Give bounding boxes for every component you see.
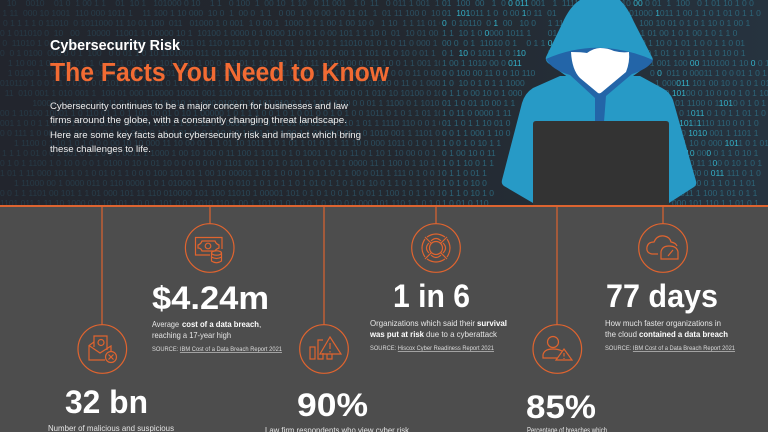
binary code pattern: right: 0 1 10 0 1011 1 0 110 101 01 0 10 0 01 1 00 10 1 01 1 0 1 0 1 1 0 10 0 1 [442,48,746,58]
source: SOURCE: Hiscox Cyber Readiness Report 2021 [370,346,495,352]
source: SOURCE: IBM Cost of a Data Breach Report 2021 [605,346,736,352]
panel: survival at risk [369,206,507,352]
binary code pattern: left: 0 1 011010 0 10 00 10000 11001 1 0 0000 10 1 10100 1 0000 0 1 0000 10 0 0 1 0 00 101 1 1 10 0 01 10 01 00 1111 10 0 1 01 [0,28,496,38]
description: How much faster organizations in [605,318,721,328]
stat: $4.24m [152,280,269,316]
binary code pattern: left: 1 0100 1 1 00 0 10 1 0 00 01 1001 0 0 1 101 0 01 0 00 1 11 0 01 000 10 110 0 11 1 00 1 0 1000 1 0 1 0 0 0 11 0 00011 1 0 0 01 1 0 [3,68,501,78]
icon: bars with warning [300,325,348,373]
header background [0,0,768,206]
stat: 90% [297,387,368,423]
binary code pattern: right: 0 0 10110 0 1 00 10 0 1 11 01 00 0 11111 1 100 10 01 0 1 0 1 10 0 1 00 1 [442,18,750,28]
binary code pattern: left: 10000 0 0 010 1 01 11 0 1 1 01 0 10 010 1 1 000 0100 0 11 101 010 0 1 0 1 0 0 1 00 0 0 01 1 1100 0 1 1010 0 1 0 1 01 1 0 1 10 0 1 [30,98,527,108]
description: the cloud [605,329,637,339]
binary code pattern: left: 1101 011 1 11 10 1000 0 0 10 101 1 0 0 1 101 0 0 10010 110 1 00 1 1010 1 0 1 0 0 1 0 110 0 0 000 101 110 1 1 0 1 0 10 0 1 01 1 0 10 [0,198,505,208]
face mask [571,48,629,93]
panel: data breach cost [152,206,283,353]
binary code pattern: left: 0 0 111 1 0 00 1 01 0 1 1 0 0 1 0 1 0 01 0 1 1 1 01 00 0 1 10 1 0 1 001 1 0 1 00 1 1 01 00 0 01 0 0 1010 001 1 1101 0 1 1 0 0 10 1 [0,128,488,138]
binary code pattern: right: 0 0 1010 001 1 1101 1 [674,128,759,138]
binary code pattern: right: 0 1 1 0 01 1 [442,168,487,178]
description: Average [152,319,179,329]
description: Organizations which said their [370,318,475,328]
binary code pattern: right: 1 0 01 0 110 [442,198,489,208]
binary code pattern: left: 1 1100 0 1 10 1 0 1 0 0 0 00 10 10 000 11 10 00 01 1 1 01 10 1011 1 0 1 01 1 01 0 1 1 11 10 0 000 1011 0 1 0 1 1 0 01 0 1 1 0 10 0 1 [14,138,514,148]
title: The Facts You Need to Know [50,59,389,87]
binary code pattern: right: 01 1 0 01 10 00 1 1 [442,98,516,108]
binary code pattern: right: 01 10 0 1 1 0 1 1 01 [680,178,756,188]
binary code pattern: right: 1 10 000 0 1 1 0 10 1 [678,148,759,158]
binary code pattern: right: 0 0 011 0 00011 1 0 0 01 1 0 1 [650,68,767,78]
hacker illustration [502,0,696,205]
description: contained a data breach [639,329,728,339]
binary code pattern: left: 0 1 1 1 1 0 11010 0 1011000 11 10 01 100 011 01000 1 0 001 1 0 00 1 1000 1 1 1 00 1 00 10 0 1 10 1 1 11 01 00 0 11111 1 [3,18,489,28]
icon: cloud with gauge [639,224,687,272]
binary code pattern: right: 10 10100 0 10 0 0 0 1 0 1 10 [660,88,768,98]
hooded body [502,76,696,203]
hood inner shadow [546,48,653,122]
panel: law firm respondents [265,206,410,432]
binary code pattern: right: 10 00 0 011 111 0 1 0 [680,168,761,178]
binary code pattern: left: 001 1 0 0 1 1 0 00 1 0 0 1 101 0 11 00 0 1 10 1 1 0 1 11 0 1 000 0 101 0 1 1 01 00 01 1 0 1 10 1 01 1 1110 110 0 0 1 0 1 1 01 10 0 [0,118,489,128]
binary code pattern: right: 1 0 10 0 1 0 1 1 1000 [442,78,525,88]
binary code pattern: right: 11 10 0 000 1011 0 1 01 [678,138,768,148]
binary code pattern: right: 000 101 110 1 1 01 0 1 [672,198,759,208]
intro text [50,101,361,154]
binary code pattern: right: 0 0 1011 0 1 0 1 1 01 1 0 [672,108,766,118]
icon: email with cross [78,325,127,373]
binary code pattern: right: 000 11 100 0 10 1 0 1 [680,158,762,168]
description: due to a cyberattack [426,329,498,339]
icon: lifebuoy [412,224,460,272]
binary code pattern: left: 1 01 1 11 000 101 1 0 1 0 01 0 1 1 0 0 0 100 101 01 1 00 10 00001 1 01 1 0 0 0 1 0 1 1 0 1 1 00 0 011 1 111 0 1 0 0 1 10 1 01 0 1 1 [0,168,494,178]
binary code pattern: right: 1 0 11 0 0000 1 11 [442,108,512,118]
binary code pattern: left: 0 1 0 1 1100 1 0 10 0 0 0 1 0100 0 10 0 01 10 0 0 0 0 0 0 0 1101 001 1 0 1 0 101 1 0 0 1 1 1 0000 11 1 100 0 1 10 1 0 1 00 1 1 0 10 [0,158,495,168]
binary code pattern: left: 00 1 10100 10001 1 0 110 01 1 0 1 101 00 01 0 10 1 00000 1 0 1 1 1 0 0 1 0 1 0 01 0 0 1 0 1 0 0 1011 0 1 0 1 1 01 10 0 1 01 00 1 0 [0,108,495,118]
binary code pattern: right: 01 1 0 1 1 10 01 0 [442,118,511,128]
binary code pattern: right: 1 00 1 1010 00 0 011 [442,58,522,68]
description: cost of a data breach [182,319,259,329]
panel: malicious emails [48,206,174,432]
intro text: Here are some key facts about cybersecurity risk and impact which bring [50,130,361,140]
description: reaching a 17-year high [152,330,231,340]
binary code pattern: left [0,0,440,205]
description [605,318,728,339]
binary code pattern: right: 01 101011 1 0 0 00 10 11 01 01 11 100 0 101000 1011 1 00 1 1 0 1 01 0 1 1 0 [442,8,761,18]
binary code pattern: left: 11 010 001 1 010 001 1 100 01 000 110000 10001 001 110 0 01 00 1111 0 0 1 1 1 0 1 000 0 0 1 010 10 10100 0 10 0 0 0 1 0 1 11 00 1 [0,88,516,98]
icon: money and coins [185,224,234,272]
stat: 1 in 6 [393,278,470,314]
laptop [533,121,669,205]
binary code pattern: left: 010110 1 0 0 1 1 0 01 0 0 0 101 1011 1 011 0 1 01 11 0 1 1 01 1100 0 00 1 0 0 1 101 00 0 1 1 0 101000 0 11 0 1 000 011 101 00 10 0 [0,78,504,88]
stat: 32 bn [65,384,148,420]
binary code pattern: right: 0 1 00 10 0 11 [442,148,496,158]
stat: 85% [526,389,596,425]
intro text: these challenges to life. [50,144,151,154]
binary code pattern: right: 011 1 100 1 01 0 1 1 [680,188,758,198]
description: was put at risk [369,329,424,339]
description [369,318,507,339]
binary code pattern: right: 1 0 1 10 0 1 1 [442,158,494,168]
binary code pattern: left: 0 11010 1 0 0 1 01 0 0 1 1 0 10 1001 11 100 1011 01 110 0 110 1 0 0 1 1 01 1 01 0 1 1 11010 01 0 1 0 11 0 000 1 0011 1 11010 [0,38,491,48]
binary code pattern: left: 1 11 000 10 1001 110 000 1011 1 11 100 1 10 000 10 0 1 00 0 1 1 0 00 1 0 0 00 1 0 11 01 1 01 11 100 0 101000 1011 1 [0,8,487,18]
description [152,319,261,340]
binary code pattern: right: 0 0 1 1 000 1 10 0 [442,128,511,138]
panel: breaches [526,206,607,432]
binary code pattern: right: 0 1 1 0 00 10 0 1 000 [442,88,523,98]
intro text: Cybersecurity continues to be a major concern for businesses and law [50,101,349,111]
panel: cloud containment [605,206,736,352]
lower panel [0,205,768,432]
binary code pattern: left: 1 1 1 0 01 0 0 1 001 0 1 1 0 0 0 0011 1 1000 1 00 10 100 0 11 100 1 1011 0 1 0 1001 1 0 10 11 0 1 10 1 10 00 0 0 1 1 0 10 01 1 0 1 [2,148,496,158]
binary code pattern: left: 1 10 00 1 0 0 111 0 1 1 0 0 11 00 1 0 1 101 1010 1 00 0 1 1101 1 10 0 00 1 1 0 11 11010 00 0 011 1 0 0 1 1 001 100 00 110100 1 [8,58,497,68]
hood [546,0,653,100]
intro text: firms around the globe, with a constantly changing threat landscape. [50,115,347,125]
description: , [259,319,261,329]
binary code pattern: right: 1 1 10 1 0 0000 1011 1 01 10 01 00 1111 10 0 1 01 00 1 0 1 00 1 0 1 1 0 [442,28,738,38]
binary code pattern: right [442,0,768,208]
description: survival [477,318,507,328]
timeline bar [0,205,768,207]
binary code pattern: right: 0 0 100 00 11 0 0 10 110 [442,68,536,78]
binary code pattern: right: 1 0 0 1 0 10 1 1 [442,138,501,148]
binary code pattern: left: 0 0 1 1 1101 00 101 1 1 01 000 101 11 110 010000 101 100 11010 1 00001 101 0 1 0 1 0 0 1 1 0 01 1 100 1 0 1 1 0 10 1 0 0 1 01 10 0 1 [0,188,513,198]
stat: 77 days [606,278,718,314]
binary code pattern: right: 00 0 0 1 11010 0 1 0 1 1 0 000 1 0011 1 11010 1 0 1 10 0 1 01 1 0 0 1 1 0 01 [442,38,745,48]
binary code pattern: right: 0 1 1 0 10 1 0 [442,188,494,198]
binary code pattern: right: 1 0 1 0 10 0 [442,178,487,188]
icon: person with warning [533,325,582,373]
binary code pattern: left: 1 11000 00 1 0000 011 0 110 0000 1 0 1 010001 1 110 0 0 010 1 0 1 0 1 1 0 1 01 0 1 1 0 1 01 10 0 1 1 0 1 1 1 0 10 0 1 01 1 0 1 00 1 [14,178,513,188]
binary code pattern: right: 0 10111110 110 0 0 1 0 [672,118,759,128]
source: SOURCE: IBM Cost of a Data Breach Report 2021 [152,347,283,353]
heading: cybersecurity risk: Cybersecurity Risk [50,37,181,54]
binary code pattern: left: 0 0 1 0100 000 0 0 1 100 0 0 01 1 0 10 1101000 011 01 110 00 11 0 1011 1 0 110 01 0 00 1 1 101 01 0 10 0 01 1 00 10 1 01 1 [0,48,488,58]
